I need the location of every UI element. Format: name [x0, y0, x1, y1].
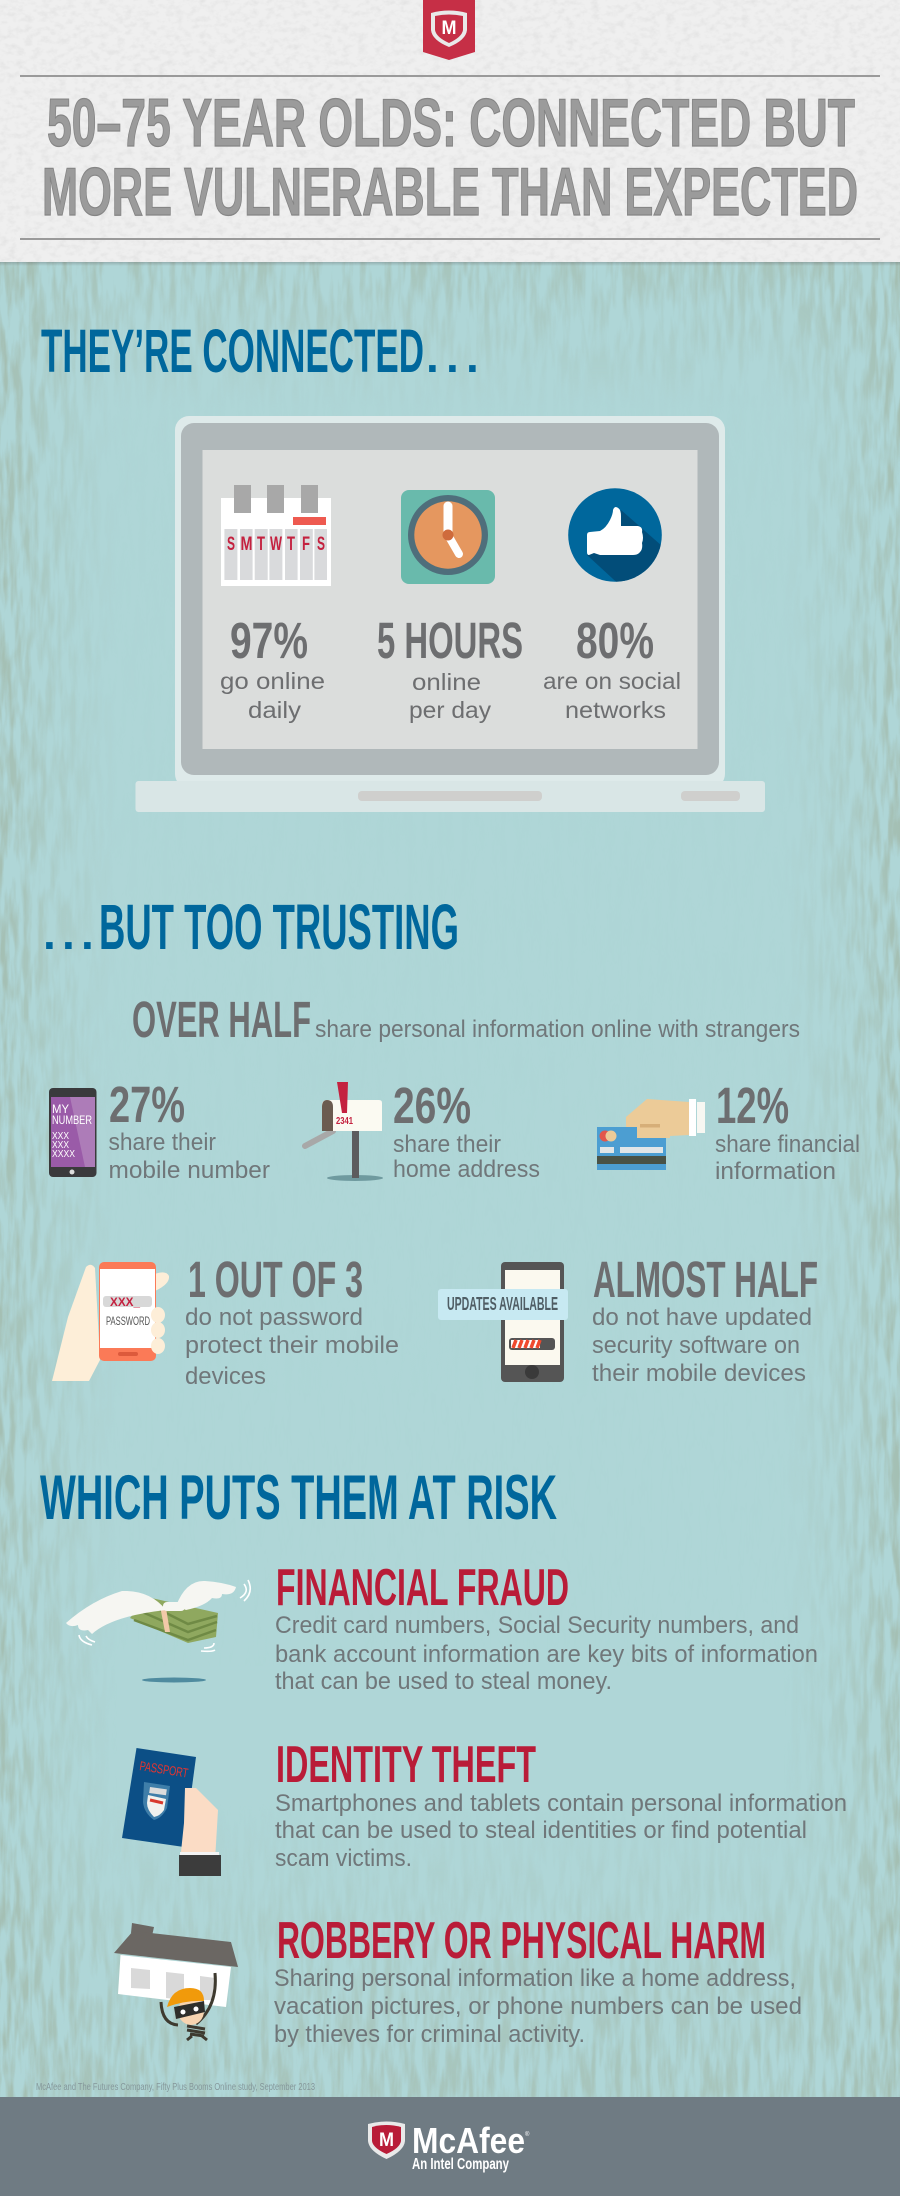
heading: but too trusting	[43, 891, 459, 963]
icon: McAfee ribbon with shield	[423, 0, 475, 60]
icon: calendar: M	[240, 534, 252, 555]
text block: over half	[132, 991, 800, 1048]
stat: almost half: security software on	[592, 1332, 800, 1359]
stat: 97% go online daily: go online	[220, 668, 325, 694]
icon: hand holding phone with password: PASSWORD	[106, 1314, 150, 1328]
icon: clock	[401, 490, 495, 584]
stat: 97% go online daily: daily	[248, 697, 302, 723]
icon: hand with credit card	[597, 1099, 705, 1170]
logo wordmark: An Intel Company	[412, 2156, 509, 2173]
risk: financial fraud: Credit card numbers, Social Security numbers, and	[275, 1612, 799, 1639]
panel: laptop	[136, 416, 765, 812]
icon: calendar: T	[287, 534, 295, 555]
risk: financial fraud: that can be used to steal money.	[275, 1668, 612, 1695]
text block: over half: share personal information online with strangers	[315, 1016, 800, 1043]
logo wordmark: ®	[525, 2131, 530, 2138]
icon: phone with my number: XXXX	[52, 1149, 75, 1160]
risk: identity theft: IDENTITY THEFT	[276, 1736, 536, 1794]
risk: financial fraud: bank account information are key bits of information	[275, 1641, 818, 1668]
stat: almost half: do not have updated	[592, 1304, 812, 1331]
stat: 26% home address: home address	[393, 1156, 540, 1183]
icon: calendar	[221, 485, 331, 586]
icon: passport in hand	[122, 1748, 221, 1876]
icon: McAfee shield	[368, 2122, 405, 2159]
risk: robbery or physical harm: by thieves for criminal activity.	[274, 2021, 585, 2048]
stat: 5 hours online per day: online	[412, 669, 481, 695]
heading: but too trusting: ...	[43, 907, 94, 959]
risk: financial fraud	[275, 1559, 818, 1695]
icon: calendar: S	[227, 534, 235, 555]
stat: 26% home address: 26%	[393, 1077, 471, 1134]
heading: they're connected	[41, 317, 479, 385]
icon: McAfee shield: M	[379, 2130, 394, 2151]
stat: 80% on social networks	[543, 612, 681, 723]
risk: identity theft: that can be used to steal identities or find potential	[275, 1817, 807, 1844]
icon: flying money	[66, 1580, 250, 1682]
stat: 80% on social networks: 80%	[576, 612, 654, 669]
icon: phone with updates available	[438, 1262, 568, 1382]
icon: mailbox	[305, 1082, 383, 1181]
icon: calendar: S	[317, 534, 325, 555]
stat: 5 hours online per day: 5 HOURS	[377, 612, 523, 669]
risk: financial fraud: FINANCIAL FRAUD	[276, 1559, 569, 1617]
stat: 1 out of 3: do not password	[185, 1304, 363, 1331]
stat: 80% on social networks: are on social	[543, 668, 681, 694]
text block: over half: OVER HALF	[132, 991, 311, 1048]
stat: 12% financial information	[715, 1077, 860, 1185]
stat: 12% financial information: share financial	[715, 1131, 860, 1158]
heading: which puts them at risk: WHICH PUTS THEM AT RISK	[40, 1463, 557, 1533]
icon: mailbox: 2341	[336, 1116, 353, 1127]
risk: identity theft: scam victims.	[275, 1845, 412, 1872]
icon: phone with updates available: UPDATES AVAILABLE	[447, 1294, 558, 1314]
stat: 1 out of 3: devices	[185, 1363, 266, 1390]
heading: but too trusting: BUT TOO TRUSTING	[99, 891, 459, 963]
stat: 27% mobile number: 27%	[109, 1076, 185, 1133]
icon: hand holding phone with password: XXX_	[110, 1295, 140, 1309]
stat: 1 out of 3: protect their mobile	[185, 1332, 399, 1359]
stat: 26% home address	[393, 1077, 540, 1183]
icon: phone with my number: XXX	[52, 1140, 69, 1151]
icon: passport in hand: PASSPORT	[139, 1758, 189, 1781]
risk: robbery or physical harm: vacation pictures, or phone numbers can be used	[274, 1993, 802, 2020]
stat: 1 out of 3	[185, 1251, 399, 1390]
risk: identity theft: Smartphones and tablets contain personal information	[275, 1790, 847, 1817]
stat: 5 hours online per day: per day	[409, 697, 492, 723]
source note: McAfee and The Futures Company, Fifty Plus Booms Online study, September 2013	[36, 2082, 315, 2093]
stat: 27% mobile number	[108, 1076, 270, 1184]
stat: almost half: their mobile devices	[592, 1360, 806, 1387]
icon: phone with my number: XXX	[52, 1131, 69, 1142]
stat: 80% on social networks: networks	[565, 697, 666, 723]
icon: phone with my number: MY	[52, 1102, 69, 1116]
stat: 1 out of 3: 1 OUT OF 3	[188, 1251, 363, 1308]
risk: identity theft	[275, 1736, 847, 1872]
icon: phone with my number: NUMBER	[52, 1113, 92, 1127]
stat: 12% financial information: 12%	[716, 1077, 789, 1134]
heading: they're connected: ...	[426, 330, 479, 382]
risk: robbery or physical harm	[274, 1912, 802, 2048]
risk: robbery or physical harm: Sharing personal information like a home address,	[274, 1965, 796, 1992]
stat: 97% go online daily	[220, 612, 325, 723]
stat: 27% mobile number: mobile number	[108, 1157, 270, 1184]
stat: 26% home address: share their	[393, 1131, 501, 1158]
stat: almost half	[592, 1251, 818, 1387]
icon: phone with my number	[49, 1088, 96, 1177]
icon: calendar: W	[270, 534, 282, 555]
stat: 5 hours online per day	[377, 612, 523, 723]
stat: 12% financial information: information	[715, 1158, 836, 1185]
title	[42, 85, 858, 230]
icon: robber carrying house	[114, 1923, 238, 2040]
stat: 97% go online daily: 97%	[230, 612, 308, 669]
icon: calendar: T	[257, 534, 265, 555]
footer bar with McAfee logo	[0, 2097, 900, 2196]
icon: thumbs up	[568, 488, 662, 582]
heading: they're connected: THEY’RE CONNECTED	[41, 317, 424, 385]
stat: 27% mobile number: share their	[108, 1129, 216, 1156]
logo wordmark: McAfee	[412, 2120, 525, 2161]
icon: McAfee ribbon with shield: M	[442, 18, 456, 39]
icon: hand holding phone with password	[52, 1262, 169, 1381]
panel: header paper	[0, 0, 900, 266]
icon: calendar: F	[302, 534, 310, 555]
